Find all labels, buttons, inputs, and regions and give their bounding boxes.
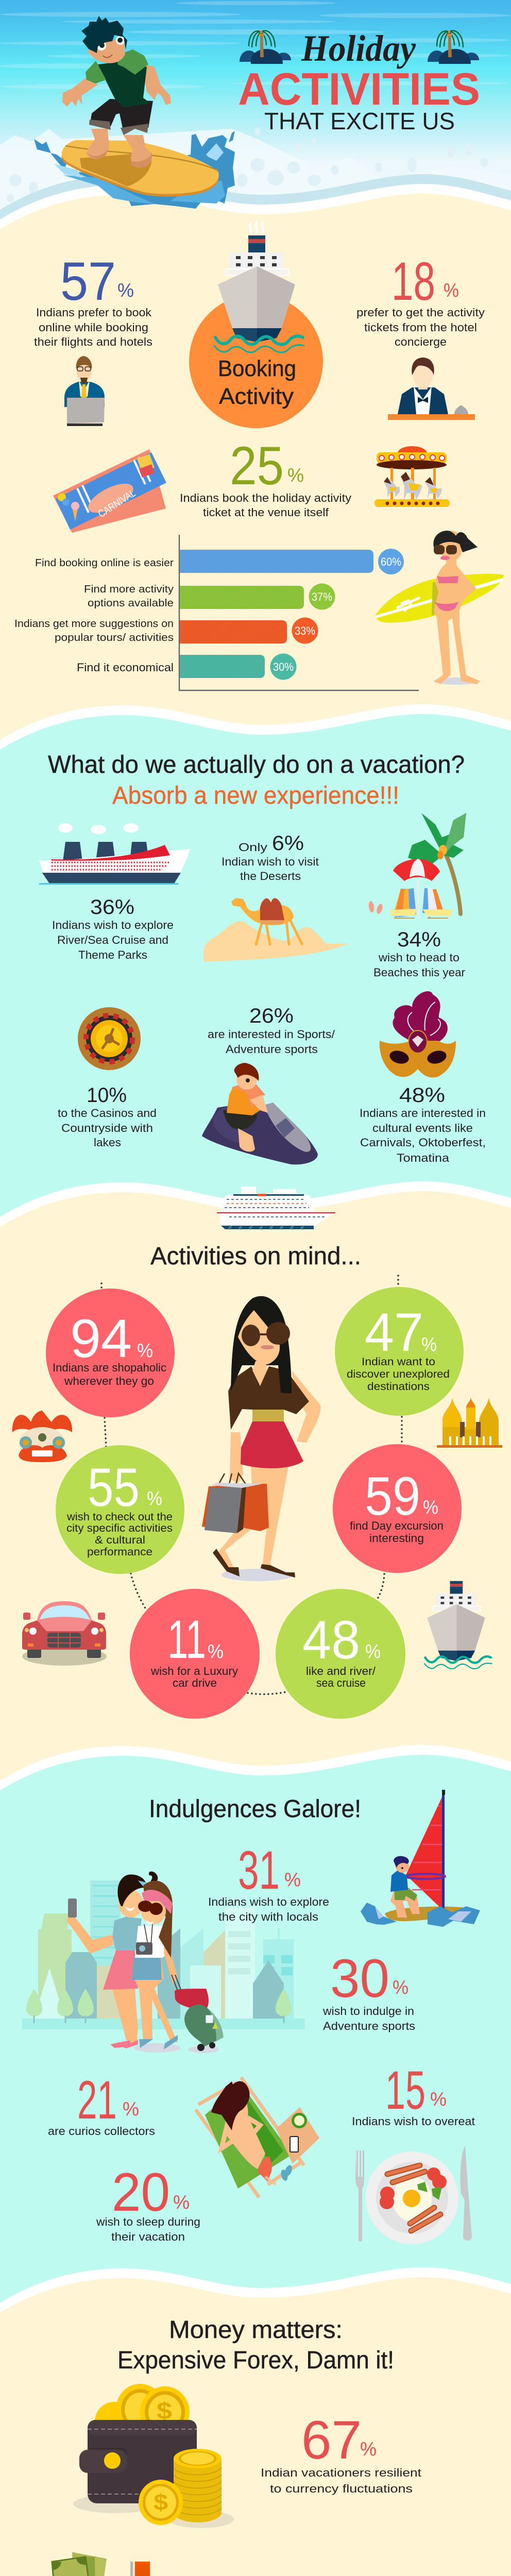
left girl — [67, 1871, 158, 2048]
circle stat: 59% day excursion: 59 — [365, 1466, 420, 1527]
stat: 57%: 57 — [60, 251, 116, 312]
stat: 20% sleep: 20 — [112, 2162, 170, 2223]
hair — [231, 1296, 292, 1393]
stat: 57%: their flights and hotels — [34, 335, 152, 348]
stat: 25%: Indians book the holiday activity — [180, 492, 351, 504]
icon: surfer girl with board — [375, 531, 504, 685]
stat: 25%: % — [287, 465, 304, 486]
face — [238, 1310, 280, 1364]
stat: 10% casinos — [58, 1084, 157, 1149]
stat: 10% casinos: 10% — [87, 1084, 127, 1107]
panel: sand background booking — [0, 194, 511, 807]
stat: 48% cultural events: Tomatina — [397, 1151, 450, 1164]
circle stat: 48% sea cruise: like and river/ — [306, 1665, 376, 1677]
shopping bags — [202, 1473, 269, 1533]
stat: 6% deserts — [222, 832, 319, 883]
stat: 57%: % — [117, 280, 134, 301]
shoes — [213, 1549, 295, 1578]
illustration: man sunbathing — [196, 2077, 319, 2197]
circle stat: 55% city activities: 55 — [88, 1458, 140, 1518]
stat: 20% sleep — [96, 2162, 200, 2243]
bar: find more activity options 37%: Find more activity — [84, 584, 174, 595]
bar: find more activity options 37% — [84, 583, 335, 610]
stat: 67% resilient: to currency fluctuations — [270, 2482, 413, 2495]
icon: windsurfer — [361, 1790, 480, 1927]
circle stat: 48% sea cruise: 48 — [302, 1610, 360, 1670]
stat: 20% sleep: % — [173, 2192, 190, 2213]
wave band: teal — [0, 174, 511, 787]
circle stat: 48% sea cruise: % — [365, 1641, 381, 1663]
stat: 34% beaches: Beaches this year — [373, 966, 465, 979]
circle stat: 59% day excursion: interesting — [369, 1532, 424, 1545]
stat: 67% resilient: % — [360, 2438, 377, 2460]
illustration: two girls taking a selfie — [67, 1871, 223, 2053]
suitcase and bag — [172, 1975, 223, 2051]
stat: 26% sports — [208, 1005, 335, 1056]
stat: 57%: Indians prefer to book — [36, 306, 152, 319]
circle stat: 55% city activities — [56, 1445, 184, 1574]
stat: 67% resilient — [261, 2410, 421, 2495]
stat: 31% locals: 31 — [238, 1840, 280, 1901]
stat: 18%: prefer to get the activity — [356, 306, 485, 319]
head — [88, 37, 125, 63]
stat: 15% overeat: 15 — [385, 2060, 425, 2121]
stat: 21% curios: 21 — [77, 2070, 117, 2130]
stat: 31% locals: % — [284, 1869, 301, 1891]
bar: find more activity options 37%: options available — [88, 598, 174, 609]
icon: red car — [22, 1601, 107, 1666]
icon: hotel concierge — [388, 358, 475, 420]
icon: right palm island — [428, 31, 479, 64]
stat: 18%: tickets from the hotel — [364, 321, 477, 334]
stat: 25% — [180, 436, 351, 519]
torso — [98, 61, 150, 108]
arm holding bags — [230, 1432, 243, 1484]
heading: money matters: Money matters: — [169, 2316, 343, 2344]
icon: ship with waves — [424, 1581, 491, 1669]
circle stat: 11% luxury car: % — [208, 1641, 224, 1663]
circle stat: 59% day excursion: % — [423, 1497, 438, 1518]
heading: what do we actually do: What do we actually do on a vacation? — [48, 751, 465, 778]
stat: 48% cultural events: Indians are interested in — [360, 1107, 486, 1120]
stat: 36% cruise: Theme Parks — [78, 948, 147, 961]
icon: wallet and coins — [73, 2384, 234, 2528]
stat: 48% cultural events — [360, 1084, 486, 1164]
heading: what do we actually do — [48, 751, 465, 809]
circle stat: 94% shopaholic: Indians are shopaholic — [53, 1361, 166, 1374]
circle stat: 55% city activities: % — [147, 1488, 162, 1510]
stat: 30% adventure sports — [322, 1948, 415, 2032]
circle stat: 55% city activities: & cultural — [95, 1534, 145, 1546]
legs — [87, 129, 109, 159]
icon: left palm island — [240, 31, 291, 64]
hair — [81, 16, 127, 53]
stat: 10% casinos: lakes — [94, 1136, 121, 1149]
stat: 36% cruise — [52, 896, 174, 961]
booking circle with ship — [189, 222, 323, 428]
icon: arrow down — [116, 2562, 167, 2576]
bar: find it economical 30% — [77, 653, 297, 680]
stat: 34% beaches: wish to head to — [378, 951, 459, 964]
panel: money matters — [0, 2267, 511, 2576]
bar: find it economical 30%: Find it economical — [77, 661, 174, 674]
icon: tribal mask — [12, 1411, 72, 1462]
bar: find booking online is easier 60%: 60% — [381, 555, 401, 568]
icon: roulette wheel — [78, 1007, 141, 1070]
stat: 21% curios — [48, 2070, 155, 2138]
stat: 57% — [34, 251, 152, 348]
bar: find booking online is easier 60%: Find booking online is easier — [35, 557, 174, 569]
icon: breakfast plate with fork and knife — [355, 2145, 472, 2244]
circle stat: 11% luxury car: 11 — [167, 1609, 206, 1670]
stat: 34% beaches — [373, 928, 465, 979]
bar: more suggestions 33%: Indians get more suggestions on — [14, 618, 174, 630]
circle stat: 47% unexplored: discover unexplored — [347, 1368, 450, 1380]
icon: man with laptop — [64, 356, 105, 426]
stat: 15% overeat — [352, 2060, 475, 2128]
stat: 25%: ticket at the venue itself — [203, 506, 329, 519]
stat: 10% casinos: Countryside with — [61, 1122, 153, 1134]
stat: 67% resilient: 67 — [301, 2410, 362, 2470]
circle stat: 11% luxury car: wish for a Luxury — [150, 1665, 238, 1677]
icon: carnival mask — [380, 991, 456, 1077]
icon: carousel — [374, 446, 450, 507]
icon: water splash — [34, 131, 235, 209]
bar: more suggestions 33%: 33% — [295, 624, 315, 637]
circle stat: 48% sea cruise — [276, 1589, 405, 1719]
stat: 30% adventure sports: wish to indulge in — [322, 2005, 414, 2018]
stat: 6% deserts: the Deserts — [240, 870, 301, 883]
stat: 21% curios: are curios collectors — [48, 2125, 155, 2138]
stat: 6% deserts: 6% — [272, 832, 304, 855]
stat: 48% cultural events: Carnivals, Oktoberfest, — [360, 1136, 486, 1149]
icon: wallet and coins: $ — [157, 2397, 172, 2424]
wave band: white — [0, 184, 511, 797]
stat: 48% cultural events: 48% — [399, 1084, 445, 1107]
icon: cruise liner — [39, 823, 191, 885]
top and belt — [228, 1366, 309, 1430]
panel: what do we do on vacation — [0, 704, 511, 1327]
bar chart: reasons to book online — [14, 535, 419, 690]
icon: carnival tickets: CARNIVAL — [96, 487, 138, 520]
bar: find booking online is easier 60% — [35, 549, 404, 574]
circle stat: 11% luxury car: car drive — [173, 1676, 217, 1689]
icon: golden temple — [437, 1398, 502, 1448]
icon: cruise ship — [214, 235, 304, 352]
sky background — [0, 0, 511, 232]
circle stat: 94% shopaholic: wherever they go — [64, 1375, 154, 1387]
stat: 26% sports: 26% — [249, 1005, 294, 1027]
stat: 18% — [356, 251, 485, 348]
surfboard — [62, 143, 219, 197]
stat: 20% sleep: their vacation — [111, 2230, 185, 2243]
right arm — [292, 1370, 320, 1443]
circle stat: 59% day excursion — [333, 1444, 462, 1573]
stat: 31% locals: the city with locals — [218, 1910, 318, 1923]
stat: 6% deserts: Indian wish to visit — [222, 855, 319, 868]
stat: 10% casinos: to the Casinos and — [58, 1107, 157, 1120]
legs — [218, 1466, 288, 1569]
stat: 15% overeat: Indians wish to overeat — [352, 2115, 475, 2128]
circle stat: 94% shopaholic: % — [137, 1340, 153, 1362]
circle stat: 94% shopaholic — [46, 1289, 175, 1417]
stat: 26% sports: Adventure sports — [226, 1043, 318, 1056]
bar: find more activity options 37%: 37% — [312, 590, 332, 603]
heading: what do we actually do: Absorb a new experience!!! — [112, 782, 399, 809]
circle stat: 94% shopaholic: 94 — [70, 1309, 132, 1369]
icon: jet ski rider — [202, 1063, 318, 1164]
icon: ship smoke — [250, 222, 263, 233]
icon: carnival tickets — [53, 449, 166, 533]
panel: activities on mind — [0, 1181, 511, 1804]
circle stat: 47% unexplored: 47 — [365, 1302, 423, 1363]
title — [238, 28, 480, 134]
stat: 57%: online while booking — [39, 321, 148, 334]
icon: beach palm with umbrella and chairs — [368, 813, 466, 918]
stat: 67% resilient: Indian vacationers resilient — [261, 2466, 421, 2479]
circle stat: 55% city activities: city specific activities — [66, 1522, 173, 1534]
circle stat: 47% unexplored: % — [421, 1334, 437, 1355]
circle stat: 59% day excursion: find Day excursion — [350, 1519, 444, 1532]
heading: activities on mind: Activities on mind... — [150, 1243, 361, 1270]
stat: 48% cultural events: cultural events like — [372, 1122, 473, 1134]
stat: 31% locals: Indians wish to explore — [208, 1895, 329, 1908]
stat: 15% overeat: % — [430, 2089, 447, 2110]
icon: dollar notes cheaper — [52, 2552, 107, 2576]
illustration: city skyline — [22, 1880, 305, 2029]
icon: camel in desert — [203, 898, 348, 962]
stat: 6% deserts: Only — [239, 841, 267, 854]
stat: 20% sleep: wish to sleep during — [96, 2215, 200, 2228]
stat: 36% cruise: Indians wish to explore — [52, 919, 174, 931]
dotted connector lines — [101, 1276, 402, 1694]
bar: find it economical 30%: 30% — [273, 660, 294, 673]
bar: more suggestions 33%: popular tours/ activities — [55, 632, 174, 643]
stat: 21% curios: % — [123, 2098, 139, 2120]
stat: 25%: 25 — [230, 436, 284, 496]
title: THAT EXCITE US — [264, 108, 455, 134]
stat: 26% sports: are interested in Sports/ — [208, 1028, 335, 1041]
heading: booking activity: Activity — [219, 384, 294, 409]
stat: 30% adventure sports: 30 — [330, 1948, 389, 2009]
stat: 36% cruise: River/Sea Cruise and — [57, 934, 168, 946]
arms — [62, 77, 98, 107]
skirt — [241, 1421, 303, 1468]
circle stat: 55% city activities: wish to check out the — [66, 1511, 173, 1523]
icon: small white cruise ship — [217, 1187, 335, 1229]
circle stat: 47% unexplored: destinations — [367, 1381, 430, 1393]
stat: 18%: 18 — [391, 251, 435, 312]
heading: booking activity — [218, 356, 296, 409]
title: ACTIVITIES — [238, 63, 480, 114]
shorts — [90, 99, 153, 128]
circle stat: 55% city activities: performance — [87, 1546, 152, 1558]
stat: 18%: concierge — [395, 335, 447, 348]
stat: 30% adventure sports: % — [393, 1977, 408, 1998]
circle stat: 11% luxury car — [130, 1589, 260, 1719]
stat: 31% locals — [208, 1840, 329, 1923]
panel: indulgences galore — [0, 1745, 511, 2368]
icon: wallet and coins: $ — [154, 2490, 168, 2515]
illustration: woman shopping — [202, 1296, 320, 1581]
illustration: surfer on board — [34, 16, 235, 209]
stat: 18%: % — [444, 280, 459, 301]
circle stat: 47% unexplored: Indian want to — [362, 1356, 435, 1368]
sea foam — [0, 127, 511, 216]
stat: 36% cruise: 36% — [90, 896, 134, 919]
heading: booking activity: Booking — [218, 356, 296, 381]
right girl — [132, 1880, 178, 2049]
title: Holiday — [301, 28, 416, 69]
stat: 30% adventure sports: Adventure sports — [323, 2020, 415, 2032]
circle stat: 48% sea cruise: sea cruise — [316, 1676, 366, 1689]
heading: money matters: Expensive Forex, Damn it! — [117, 2347, 394, 2374]
heading: indulgences galore: Indulgences Galore! — [149, 1795, 361, 1823]
heading: money matters — [117, 2316, 394, 2374]
bar: more suggestions 33% — [14, 617, 318, 644]
stat: 34% beaches: 34% — [397, 928, 441, 951]
circle stat: 47% unexplored — [335, 1287, 464, 1416]
